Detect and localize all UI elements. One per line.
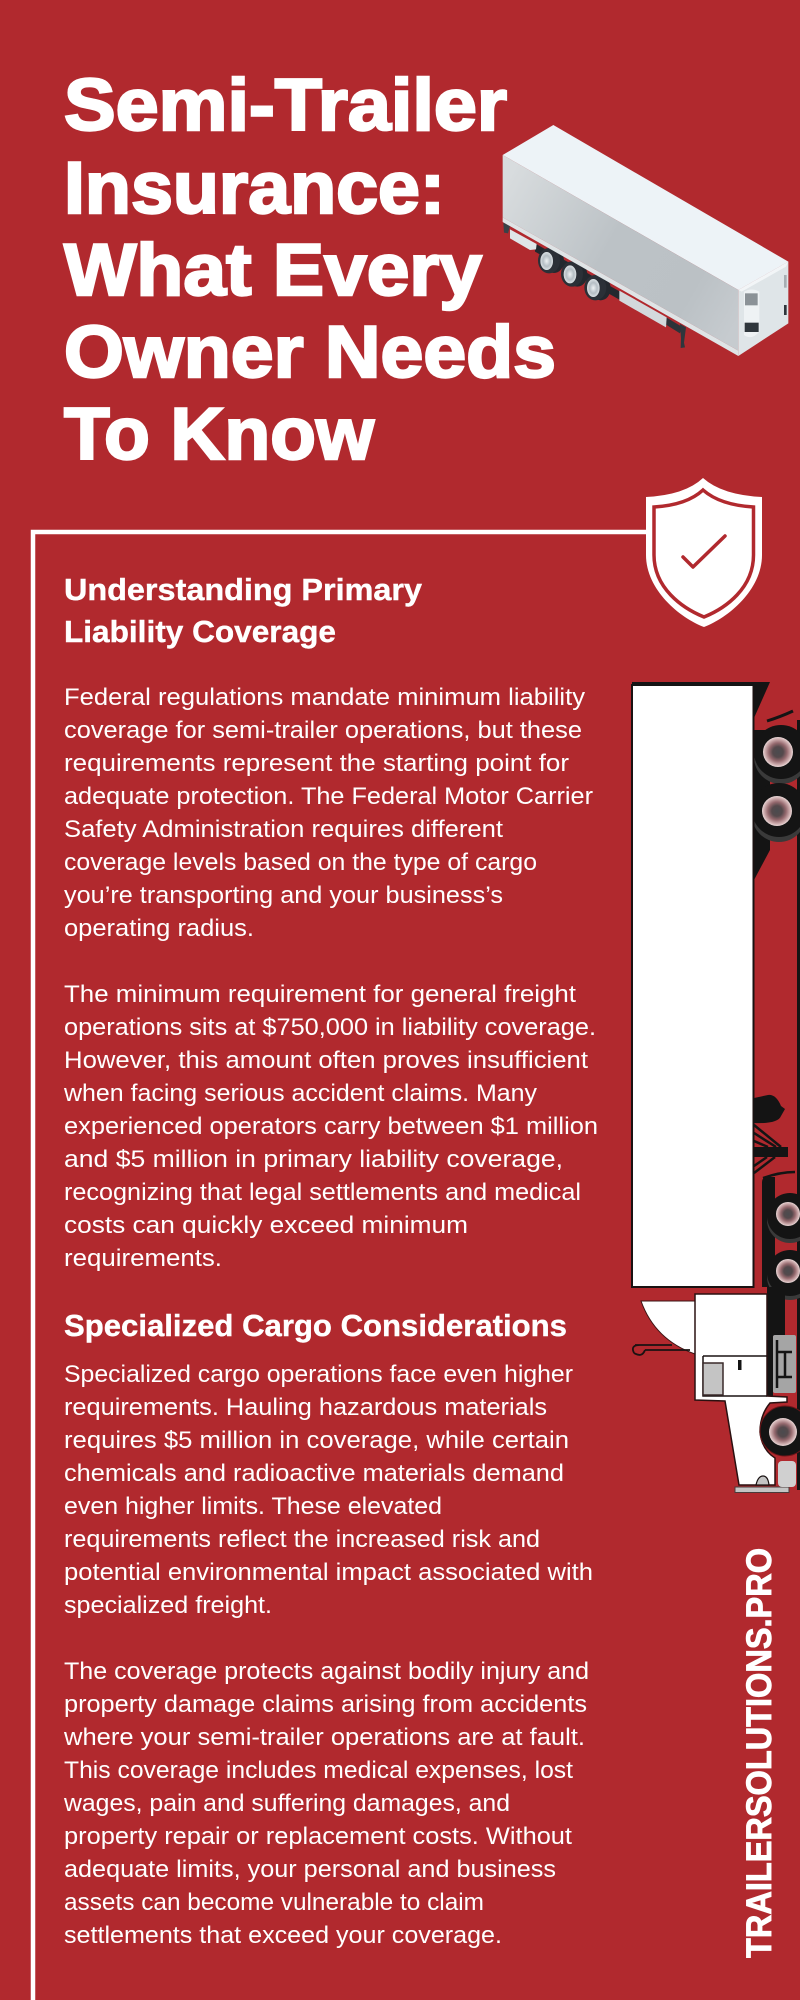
paragraph: what the coverage protects: The coverage protects against bodily injury and [64, 1658, 589, 1685]
icon: isometric semi-trailer [503, 125, 788, 356]
paragraph: federal regulations: adequate protection. The Federal Motor Carrier [64, 783, 593, 810]
paragraph: minimum requirement: experienced operators carry between $1 million [64, 1113, 598, 1140]
paragraph: federal regulations [64, 684, 593, 942]
icon: truck seen from above [632, 682, 800, 1492]
frame: white border of the content panel [33, 532, 650, 2000]
heading: primary liability: Liability Coverage [64, 614, 336, 649]
paragraph: minimum requirement [63, 981, 598, 1272]
title: Owner Needs [64, 312, 556, 393]
paragraph: federal regulations: coverage for semi-trailer operations, but these [64, 717, 582, 744]
title [64, 65, 556, 475]
paragraph: what the coverage protects: adequate limits, your personal and business [64, 1856, 556, 1883]
paragraph: what the coverage protects: assets can become vulnerable to claim [64, 1889, 484, 1916]
cab [633, 1294, 796, 1492]
vertical black edge line [797, 720, 800, 1490]
brand: vertical site name: TRAILERSOLUTIONS.PRO [740, 1548, 779, 1958]
paragraph: what the coverage protects [63, 1658, 589, 1949]
paragraph: what the coverage protects: wages, pain and suffering damages, and [63, 1790, 510, 1817]
paragraph: minimum requirement: requirements. [64, 1245, 222, 1272]
paragraph: minimum requirement: recognizing that legal settlements and medical [64, 1179, 581, 1206]
paragraph: minimum requirement: operations sits at $750,000 in liability coverage. [64, 1014, 596, 1041]
paragraph: what the coverage protects: property damage claims arising from accidents [64, 1691, 587, 1718]
paragraph: specialized cargo operations: requirements. Hauling hazardous materials [64, 1394, 547, 1421]
paragraph: what the coverage protects: where your semi-trailer operations are at fault. [63, 1724, 585, 1751]
paragraph: federal regulations: operating radius. [64, 915, 254, 942]
title: To Know [64, 394, 374, 475]
paragraph: specialized cargo operations: even higher limits. These elevated [64, 1493, 442, 1520]
section: understanding primary liability coverage [63, 572, 598, 1272]
icon: shield with check mark [646, 478, 762, 627]
title: What Every [64, 230, 482, 311]
front axle tires [762, 1172, 800, 1300]
paragraph: minimum requirement: The minimum requirement for general freight [64, 981, 576, 1008]
paragraph: federal regulations: Federal regulations mandate minimum liability [64, 684, 586, 711]
paragraph: specialized cargo operations: specialized freight. [64, 1592, 272, 1619]
heading: specialized cargo: Specialized Cargo Considerations [64, 1308, 567, 1343]
title: Insurance: [64, 148, 445, 229]
paragraph: specialized cargo operations: Specialized cargo operations face even higher [64, 1361, 573, 1388]
coupling and air tanks [754, 1095, 788, 1173]
paragraph: specialized cargo operations: requirements reflect the increased risk and [64, 1526, 540, 1553]
front tire [760, 1406, 800, 1456]
paragraph: minimum requirement: and $5 million in primary liability coverage, [64, 1146, 563, 1173]
paragraph: specialized cargo operations: requires $5 million in coverage, while certain [64, 1427, 569, 1454]
grille [773, 1335, 796, 1393]
paragraph: what the coverage protects: settlements that exceed your coverage. [64, 1922, 502, 1949]
title: Semi-Trailer [64, 65, 507, 146]
paragraph: federal regulations: you’re transporting and your business’s [64, 882, 503, 909]
paragraph: federal regulations: requirements represent the starting point for [64, 750, 569, 777]
paragraph: federal regulations: Safety Administration requires different [64, 816, 503, 843]
rear wheels [538, 248, 611, 300]
rear axle tires [752, 711, 800, 880]
heading: primary liability [64, 572, 423, 649]
paragraph: federal regulations: coverage levels based on the type of cargo [64, 849, 537, 876]
paragraph: what the coverage protects: property repair or replacement costs. Without [64, 1823, 572, 1850]
trailer body [632, 685, 754, 1287]
heading: primary liability: Understanding Primary [64, 572, 423, 607]
paragraph: minimum requirement: However, this amount often proves insufficient [64, 1047, 588, 1074]
paragraph: minimum requirement: when facing serious accident claims. Many [63, 1080, 538, 1107]
paragraph: minimum requirement: costs can quickly exceed minimum [64, 1212, 468, 1239]
paragraph: specialized cargo operations: chemicals and radioactive materials demand [64, 1460, 564, 1487]
paragraph: what the coverage protects: This coverage includes medical expenses, lost [64, 1757, 573, 1784]
section: specialized cargo considerations [63, 1308, 593, 1949]
paragraph: specialized cargo operations: potential environmental impact associated with [64, 1559, 593, 1586]
paragraph: specialized cargo operations [64, 1361, 593, 1619]
